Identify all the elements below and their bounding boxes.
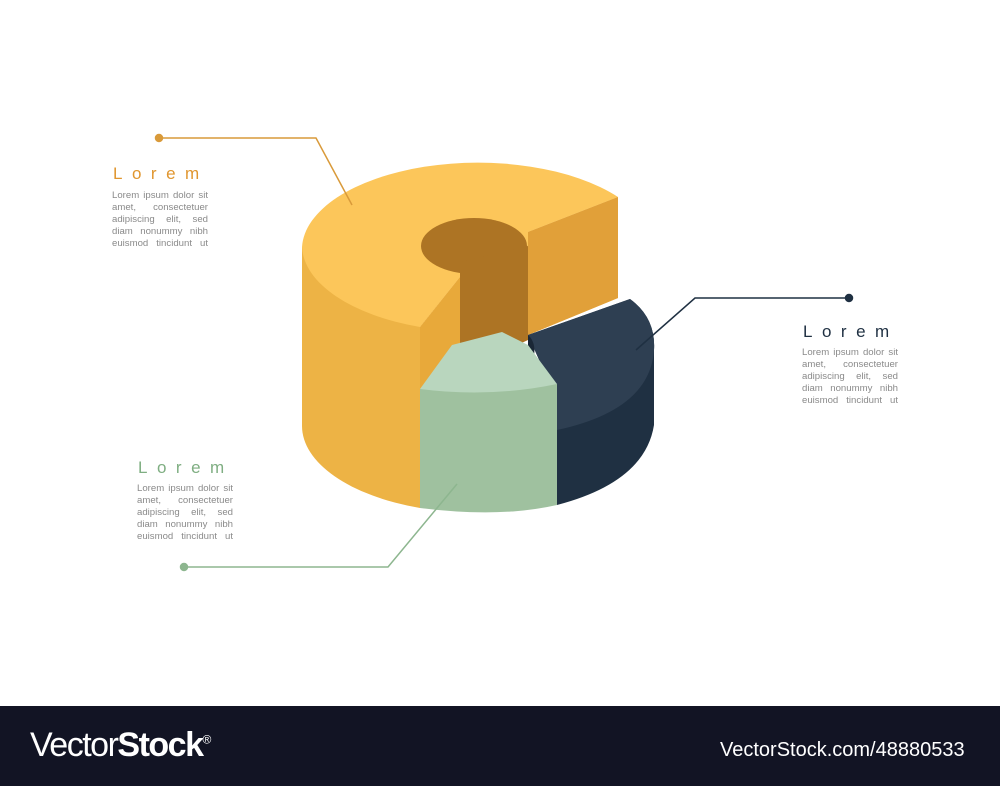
leader line: green [180, 484, 457, 570]
slice: navy [528, 299, 654, 505]
text: navy body: Lorem ipsum dolor sit amet, consectetuer adipiscing elit, sed diam nonummy nibh euismod tincidunt ut [802, 347, 898, 406]
leader line: navy [636, 294, 852, 350]
slice: yellow [302, 163, 618, 508]
heading: orange Lorem: Lorem [113, 164, 209, 183]
heading: green Lorem: Lorem [138, 458, 234, 477]
heading: navy Lorem: Lorem [803, 322, 899, 341]
text: green body: Lorem ipsum dolor sit amet, consectetuer adipiscing elit, sed diam nonummy nibh euismod tincidunt ut [137, 483, 233, 542]
footer logo: VectorStock® [30, 726, 210, 764]
leader line: orange [156, 134, 352, 205]
footer [0, 706, 1000, 786]
text: orange body: Lorem ipsum dolor sit amet, consectetuer adipiscing elit, sed diam nonummy nibh euismod tincidunt ut [112, 190, 208, 249]
slice: green [420, 332, 557, 512]
footer url: VectorStock.com/48880533 [720, 739, 965, 761]
